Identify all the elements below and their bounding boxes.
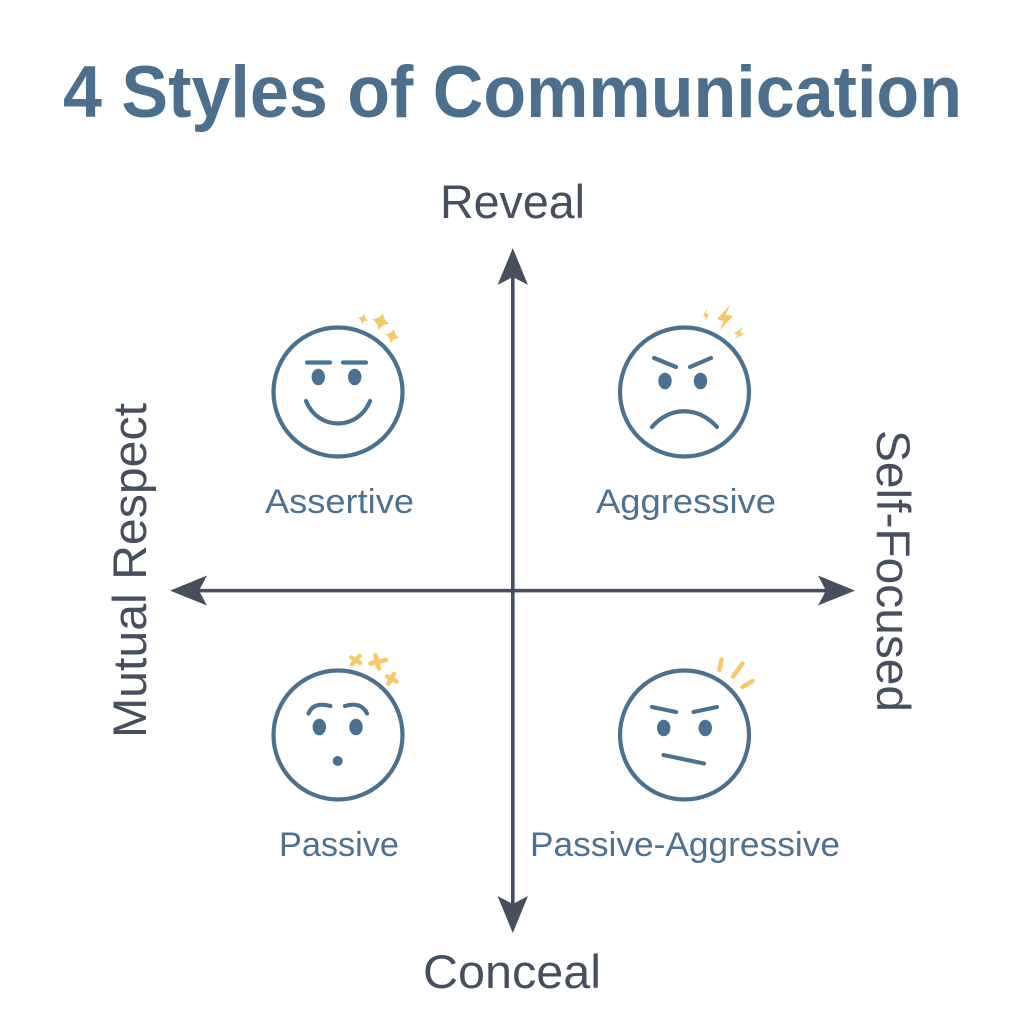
icon: yellow crosses: [352, 656, 396, 684]
arrow: horizontal axis: [170, 576, 855, 606]
quadrant: Aggressive: [596, 305, 776, 521]
label: Assertive: Assertive: [265, 483, 414, 521]
axis label: Conceal: Conceal: [423, 945, 601, 998]
icon: yellow emphasis lines: [720, 660, 752, 687]
icon: smiling face: [274, 328, 402, 456]
axis label: Mutual Respect: Mutual Respect: [103, 403, 156, 738]
quadrant: Passive-Aggressive: [530, 660, 840, 864]
icon: worried face: [274, 670, 402, 800]
chart: quadrant axes: [170, 248, 855, 933]
label: Passive: Passive: [279, 826, 399, 864]
axis label: Self-Focused: Self-Focused: [867, 430, 920, 712]
icon: yellow lightning bolts: [703, 305, 744, 340]
icon: yellow sparkles: [356, 310, 401, 345]
icon: skeptical face: [620, 670, 749, 800]
label: Aggressive: Aggressive: [596, 483, 776, 521]
icon: angry face: [620, 328, 749, 456]
quadrant: Assertive: [265, 310, 414, 521]
arrow: vertical axis: [498, 248, 528, 933]
label: Passive-Aggressive: Passive-Aggressive: [530, 826, 840, 864]
quadrant: Passive: [274, 656, 402, 864]
title: 4 Styles of Communication: [63, 52, 962, 133]
axis label: Reveal: Reveal: [440, 175, 585, 228]
